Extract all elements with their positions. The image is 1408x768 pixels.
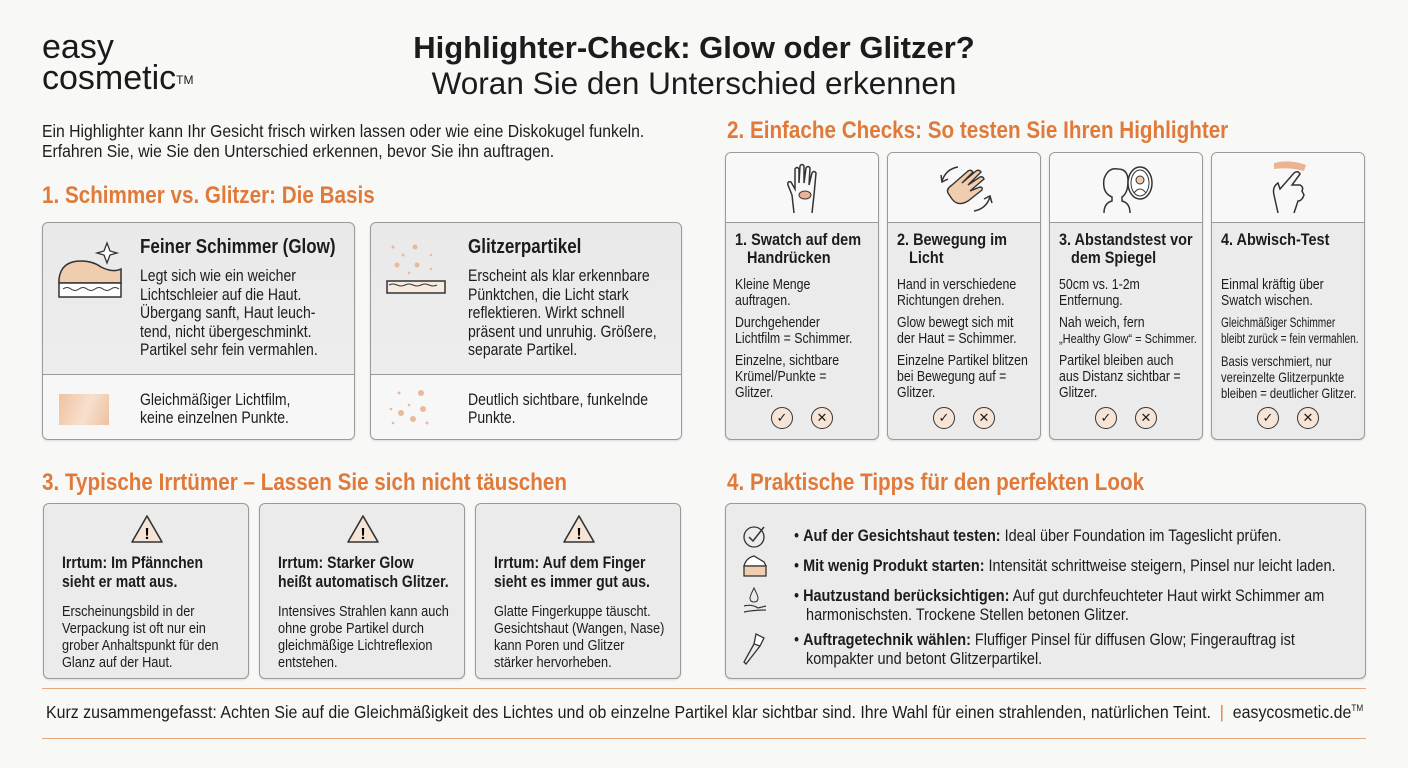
logo: easy [42,28,114,66]
error card 3: stärker hervorheben. [494,654,612,671]
icon: sparkle dots [390,390,428,424]
error card 2: gleichmäßige Lichtreflexion [278,637,433,654]
panel: glow: Partikel sehr fein vermahlen. [140,341,318,359]
intro text [42,121,644,161]
icon: glitter layer [386,244,446,294]
panel: tips: • Mit wenig Produkt starten: Intensität schrittweise steigern, Pinsel nur leicht laden. [794,556,1336,575]
heading 2: 2. Einfache Checks: So testen Sie Ihren Highlighter [727,117,1228,144]
error card 3: Gesichtshaut (Wangen, Nase) [494,620,664,637]
card: distance [1049,152,1203,440]
heading 3: 3. Typische Irrtümer – Lassen Sie sich nicht täuschen [42,469,567,496]
error card 1: Erscheinungsbild in der [62,603,195,620]
card: distance: Glitzer. [1059,385,1097,401]
card: wipe: ✕ [1303,410,1313,425]
logo [42,28,193,97]
icon: drop hand [744,587,766,613]
icon: warning [347,515,379,543]
heading 4: 4. Praktische Tipps für den perfekten Look [727,469,1144,496]
panel: tips: • Auf der Gesichtshaut testen: Ideal über Foundation im Tageslicht prüfen. [794,526,1281,545]
footer [42,688,1366,739]
error card 2: heißt automatisch Glitzer. [278,573,449,591]
error card 1: Irrtum: Im Pfännchen [62,554,203,572]
card: distance: ✕ [1141,410,1151,425]
panel: glitter: Glitzerpartikel [468,236,581,258]
panel: glitter: Deutlich sichtbare, funkelnde [468,391,648,409]
panel: glitter [370,222,682,440]
card: wipe: Einmal kräftig über [1221,277,1324,293]
card: wipe: Basis verschmiert, nur [1221,353,1332,369]
icon: warning: ! [360,526,366,543]
card: movement: 2. Bewegung im [897,230,1007,249]
card: movement: Einzelne Partikel blitzen [897,353,1028,369]
panel: glow: Lichtschleier auf die Haut. [140,286,301,304]
card: swatch [725,152,879,440]
panel: glow: Gleichmäßiger Lichtfilm, [140,391,290,409]
card: swatch: Lichtfilm = Schimmer. [735,331,852,347]
panel: glow [42,222,355,440]
panel: glitter: präsent und unruhig. Größere, [468,322,657,340]
card: movement: Hand in verschiedene [897,277,1016,293]
card: movement: ✕ [979,410,989,425]
card: movement: bei Bewegung auf = [897,369,1006,385]
error card 3: Glatte Fingerkuppe täuscht. [494,603,651,620]
card: distance: Nah weich, fern [1059,315,1145,331]
panel: tips: harmonischsten. Trockene Stellen betonen Glitzer. [806,605,1129,624]
error card 3: sieht es immer gut aus. [494,573,650,591]
error card 2: entstehen. [278,654,338,671]
icon: hand swatch [787,164,817,214]
title: Highlighter-Check: Glow oder Glitzer? [413,30,975,65]
logo: cosmeticTM [42,59,193,97]
panel: glow: Legt sich wie ein weicher [140,267,296,285]
card: swatch: auftragen. [735,293,791,309]
card: wipe: 4. Abwisch-Test [1221,230,1329,249]
card: movement: ✓ [939,410,949,425]
card: swatch: 1. Swatch auf dem [735,230,861,249]
card: wipe: bleiben = deutlicher Glitzer. [1221,385,1356,401]
card: movement: Glitzer. [897,385,935,401]
panel: glitter: Punkte. [468,409,516,427]
card: distance: 50cm vs. 1-2m [1059,277,1140,293]
card: movement: Richtungen drehen. [897,293,1005,309]
icon: warning [563,515,595,543]
icon: person mirror [1102,166,1153,213]
icon: warning: ! [576,526,582,543]
card: swatch: ✓ [777,410,787,425]
panel: glow: keine einzelnen Punkte. [140,409,289,427]
panel: glow: Übergang sanft, Haut leuch- [140,304,315,322]
title [413,30,975,101]
card: distance: aus Distanz sichtbar = [1059,369,1181,385]
card: swatch: Kleine Menge [735,277,810,293]
icon: check [743,526,765,548]
intro text: Erfahren Sie, wie Sie den Unterschied erkennen, bevor Sie ihn auftragen. [42,141,554,161]
error card 2: Intensives Strahlen kann auch [278,603,449,620]
error card 1: Verpackung ist oft nur ein [62,620,206,637]
card: distance: ✓ [1101,410,1111,425]
card: swatch: Durchgehender [735,315,820,331]
error card 1: sieht er matt aus. [62,573,177,591]
card: swatch: Handrücken [747,248,831,267]
error card 2: Irrtum: Starker Glow [278,554,414,572]
panel: glitter: separate Partikel. [468,341,577,359]
panel: tips [725,503,1366,679]
card: wipe: Gleichmäßiger Schimmer [1221,315,1335,330]
card: movement: Glow bewegt sich mit [897,315,1013,331]
error card 3: kann Poren und Glitzer [494,637,624,654]
icon: glow layer [58,241,122,298]
card: movement [887,152,1041,440]
footer: Kurz zusammengefasst: Achten Sie auf die Gleichmäßigkeit des Lichtes und ob einzelne Partikel klar sichtbar sind. Ihre Wahl für einen strahlenden, natürlichen Teint. | easycosmetic.deTM [46,702,1363,722]
error card 3 [475,503,681,679]
card: wipe: bleibt zurück = fein vermahlen. [1221,331,1359,346]
card: swatch: Krümel/Punkte = [735,369,826,385]
error card 1 [43,503,249,679]
panel: tips: • Hautzustand berücksichtigen: Auf gut durchfeuchteter Haut wirkt Schimmer am [794,586,1324,605]
error card 2: ohne grobe Partikel durch [278,620,424,637]
icon: warning [131,515,163,543]
error card 1: grober Anhaltspunkt für den [62,637,219,654]
card: wipe: vereinzelte Glitzerpunkte [1221,369,1344,385]
icon: waving hand [940,166,993,212]
card: distance: „Healthy Glow“ = Schimmer. [1059,331,1197,346]
error card 1: Glanz auf der Haut. [62,654,173,671]
icon: warning: ! [144,526,150,543]
title: Woran Sie den Unterschied erkennen [432,65,956,101]
panel: glitter: Pünktchen, die Licht stark [468,286,629,304]
panel: glow: tend, nicht übergeschminkt. [140,322,312,340]
panel: tips: kompakter und betont Glitzerpartikel. [806,649,1042,668]
card: distance: Partikel bleiben auch [1059,353,1173,369]
card: movement: Licht [909,248,944,267]
icon: light film swatch [59,394,109,425]
heading 1: 1. Schimmer vs. Glitzer: Die Basis [42,182,375,209]
icon: jar [743,555,767,577]
card: swatch: ✕ [817,410,827,425]
card: distance: 3. Abstandstest vor [1059,230,1193,249]
intro text: Ein Highlighter kann Ihr Gesicht frisch wirken lassen oder wie eine Diskokugel funkeln. [42,121,644,141]
card: distance: dem Spiegel [1071,248,1156,267]
panel: tips: • Auftragetechnik wählen: Fluffiger Pinsel für diffusen Glow; Fingerauftrag ist [794,630,1295,649]
panel: glitter: Erscheint als klar erkennbare [468,267,650,285]
card: swatch: Glitzer. [735,385,773,401]
panel: glitter: reflektieren. Wirkt schnell [468,304,625,322]
card: wipe [1211,152,1365,440]
icon: brush [743,633,765,665]
card: movement: der Haut = Schimmer. [897,331,1017,347]
card: swatch: Einzelne, sichtbare [735,353,839,369]
card: distance: Entfernung. [1059,293,1123,309]
error card 3: Irrtum: Auf dem Finger [494,554,645,572]
error card 2 [259,503,465,679]
card: wipe: ✓ [1263,410,1273,425]
icon: finger wipe [1272,161,1306,214]
card: wipe: Swatch wischen. [1221,293,1313,309]
panel: glow: Feiner Schimmer (Glow) [140,236,336,258]
